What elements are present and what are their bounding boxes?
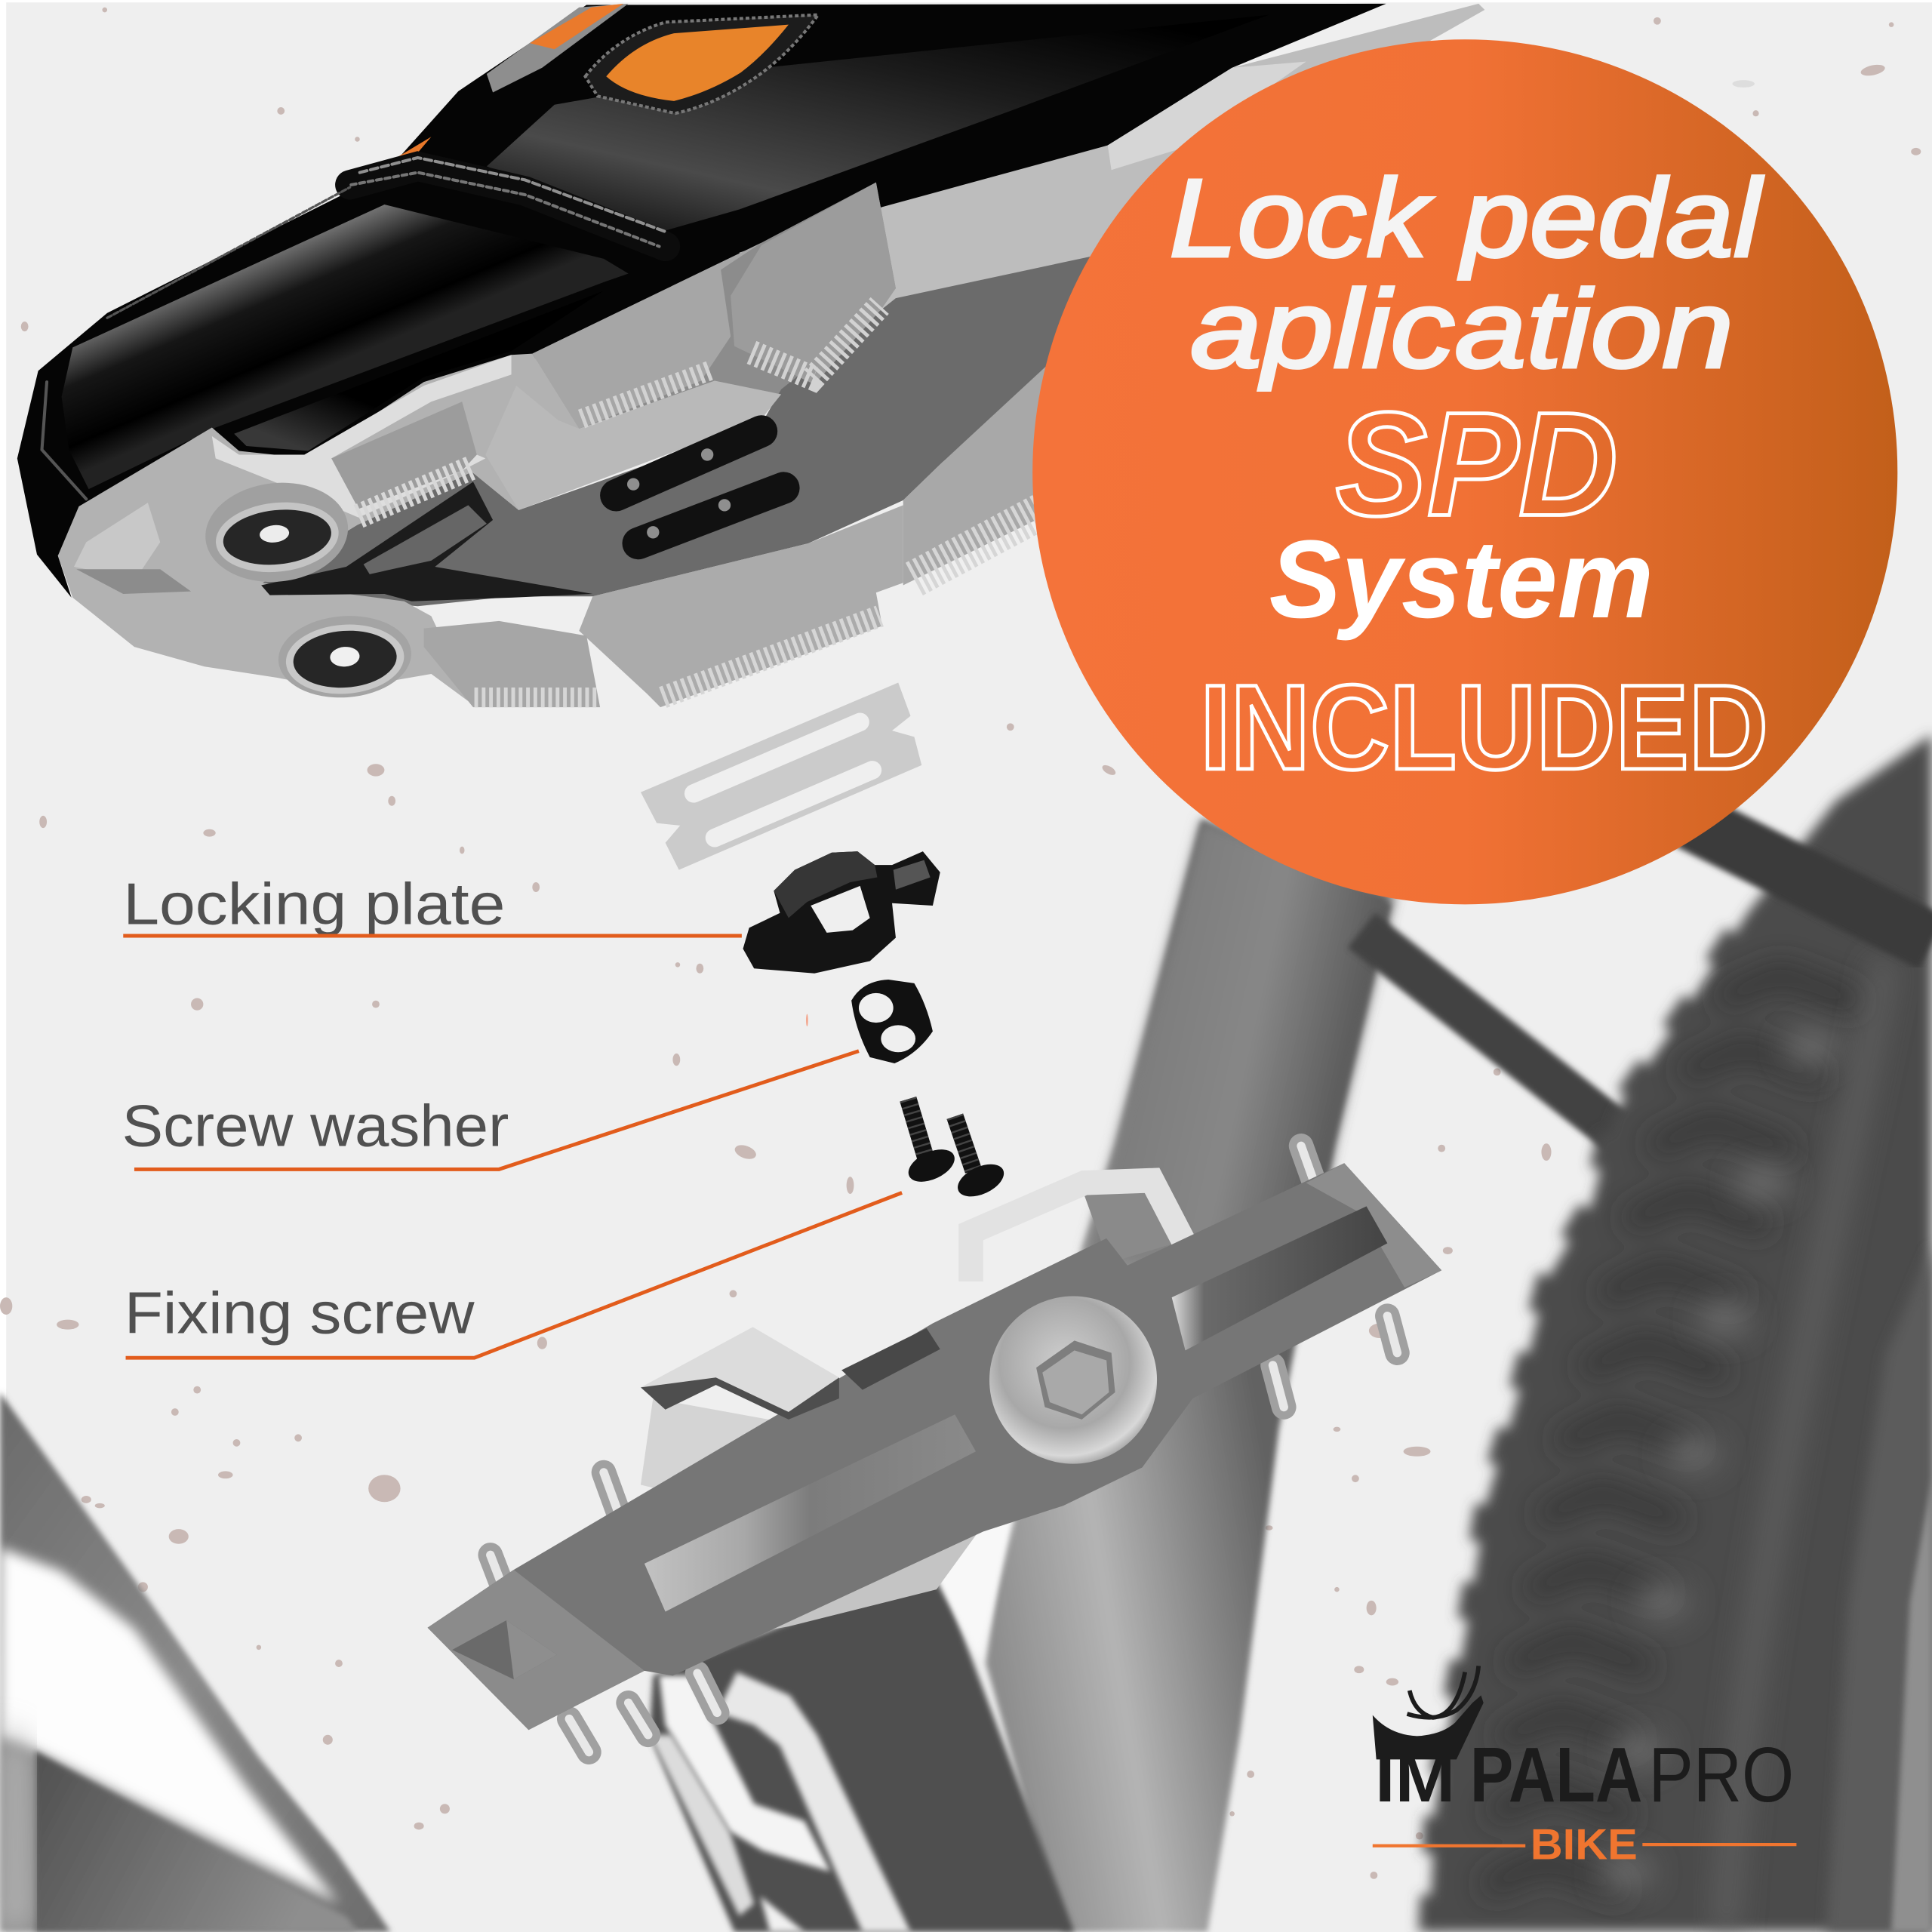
pedal [428, 1146, 1441, 1752]
toe teeth [358, 467, 473, 516]
crank white stripe B [717, 1672, 911, 1932]
pedal body [428, 1163, 1441, 1730]
locking plate part [743, 851, 940, 974]
lower-left frame [0, 1392, 391, 1932]
fixing screws [903, 1099, 1009, 1203]
tyre tread [1484, 974, 1860, 1891]
screw washer part [851, 980, 933, 1063]
heading: aplication: aplication [1190, 268, 1734, 392]
heading: system: System [1269, 518, 1654, 641]
tyre [1429, 734, 1932, 1932]
logo bike tag: BIKE [1531, 1821, 1638, 1869]
crank arm [649, 1564, 1075, 1932]
callout: fixing screw [125, 1192, 902, 1358]
sole top band [740, 4, 1484, 407]
front block [424, 621, 600, 707]
shoe upper [17, 4, 1386, 598]
centre bolt [989, 1297, 1157, 1464]
lower sole block [579, 505, 903, 707]
pedal left window [645, 1414, 976, 1612]
cleat teeth [582, 306, 880, 419]
logo wordmark [1375, 1731, 1794, 1818]
dark frame triangle [35, 1751, 357, 1932]
slot screws [627, 448, 731, 538]
callout: screw washer [122, 1051, 859, 1169]
front clip [641, 1327, 839, 1420]
tube top shade [1084, 820, 1395, 1281]
logo [1373, 1666, 1796, 1869]
stitched strap [42, 158, 666, 499]
cleat backing [532, 183, 896, 429]
heel teeth [914, 512, 1041, 579]
top orange and white stripe [487, 4, 629, 92]
orange badge [1032, 39, 1897, 904]
shoe [17, 4, 1484, 707]
fender bridge [1688, 820, 1932, 943]
lower gloss band [234, 291, 604, 451]
shim plate [641, 682, 921, 870]
blurred bike frame background [0, 734, 1932, 1932]
toe sheen [62, 205, 629, 489]
callout: fixing screw: Fixing screw [125, 1280, 475, 1346]
cleat block one [532, 243, 761, 429]
logo wordmark: PALA [1470, 1731, 1642, 1818]
sole main toe [58, 354, 579, 705]
heading: SPD outline: SPD [1336, 381, 1618, 546]
black star mark [261, 481, 592, 601]
toe highlights [212, 355, 512, 518]
tyre sidewall highlight [1725, 961, 1885, 1932]
bright gap beside crank [918, 1509, 1017, 1660]
tyre lugs [1599, 1030, 1838, 1890]
sole dark plate [263, 253, 1109, 606]
heading: lock pedal: Lock pedal [1169, 157, 1764, 281]
crank white stripe C [760, 1897, 804, 1932]
cleat lug two [275, 611, 414, 702]
back cage [971, 1180, 1186, 1281]
pedal dark notch [841, 1328, 940, 1390]
logo wordmark: PRO [1648, 1731, 1794, 1818]
pedal pins [491, 1146, 1397, 1752]
pedal right window [1172, 1206, 1387, 1350]
lower orange accent [370, 137, 431, 174]
logo wordmark: IM [1375, 1743, 1455, 1816]
cleat block front [485, 380, 781, 510]
axle underside [690, 1521, 986, 1638]
orange patch [586, 15, 818, 113]
crank beaded stripe [649, 1735, 754, 1916]
cleat block two [731, 183, 896, 384]
upper sheen [487, 15, 1269, 234]
cleat slots [616, 431, 783, 543]
cleat lug one [201, 475, 353, 589]
pedal pyramid [452, 1620, 557, 1679]
logo deer [1373, 1666, 1484, 1759]
crank white stripe A [659, 1675, 830, 1872]
seat tube [986, 820, 1391, 1932]
white frame stripe [0, 1548, 339, 1903]
callout: screw washer: Screw washer [122, 1092, 509, 1158]
rim [1826, 1244, 1932, 1932]
sole right light strip [903, 308, 1109, 586]
callout: locking plate: Locking plate [123, 870, 505, 937]
thin stay [1361, 931, 1626, 1140]
heading: included outline: INCLUDED [1200, 660, 1768, 795]
